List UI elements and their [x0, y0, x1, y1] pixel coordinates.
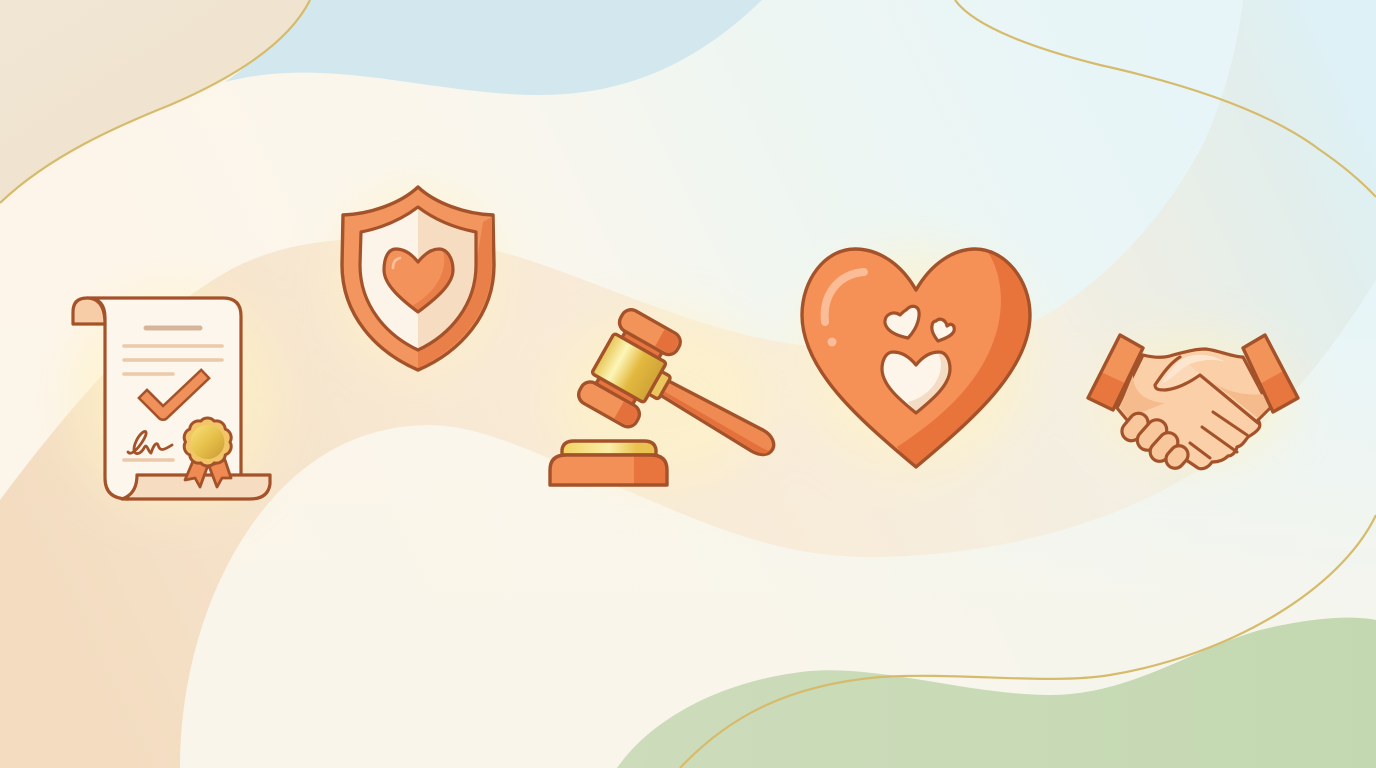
- document text lines: [124, 346, 222, 460]
- shield inner right: [418, 207, 476, 350]
- neck: [593, 325, 665, 411]
- shield frame: [342, 187, 494, 370]
- collar: [648, 371, 671, 400]
- right cuff: [1243, 335, 1298, 412]
- shield heart: [384, 249, 455, 312]
- hand shade: [1120, 375, 1269, 418]
- background: top blue blob: [225, 0, 762, 95]
- finger lines: [1190, 412, 1247, 458]
- icon: big heart: [802, 245, 1040, 475]
- small heart right: [932, 319, 954, 341]
- scroll top curl: [73, 298, 105, 324]
- thumb highlight: [1162, 355, 1225, 383]
- shield inner left: [360, 207, 418, 350]
- shield inner outline: [360, 207, 476, 350]
- top cap: [616, 306, 684, 358]
- heart body: [802, 249, 1030, 467]
- hands body: [1117, 349, 1270, 469]
- shield frame right shade: [418, 217, 492, 368]
- left cuff: [1088, 335, 1143, 410]
- document title line: [146, 326, 200, 330]
- heart highlight: [825, 272, 864, 322]
- heart shade: [897, 253, 1028, 464]
- icon: handshake: [1088, 335, 1298, 472]
- icon: shield with heart: [342, 187, 494, 370]
- lower left fingers: [1118, 409, 1152, 445]
- background: green hill: [617, 618, 1376, 768]
- soft glows behind icons: [70, 190, 1292, 510]
- signature: [128, 431, 172, 454]
- sound block base: [550, 455, 667, 485]
- thumb: [1155, 357, 1258, 423]
- icon: gavel: [550, 306, 799, 495]
- background: top-left tan corner: [0, 0, 310, 203]
- ribbon tails: [185, 460, 231, 487]
- handle: [654, 375, 779, 460]
- gold seal: [184, 418, 231, 466]
- heart outline: [802, 249, 1030, 467]
- gold band: [592, 333, 666, 403]
- gold line: bottom right: [680, 515, 1376, 768]
- bottom cap: [575, 378, 643, 430]
- icon: certificate scroll: [73, 298, 270, 499]
- large cutout heart: [882, 352, 952, 413]
- background: lower cream fade: [0, 300, 1376, 768]
- gold line: top left: [0, 0, 310, 203]
- sound block top: [562, 441, 656, 455]
- check mark: [147, 378, 201, 414]
- gavel handle and head: [575, 306, 799, 495]
- scroll bottom fold: [122, 475, 270, 499]
- scroll paper: [87, 298, 241, 499]
- gold line: top right: [955, 0, 1376, 197]
- small heart left: [885, 306, 919, 338]
